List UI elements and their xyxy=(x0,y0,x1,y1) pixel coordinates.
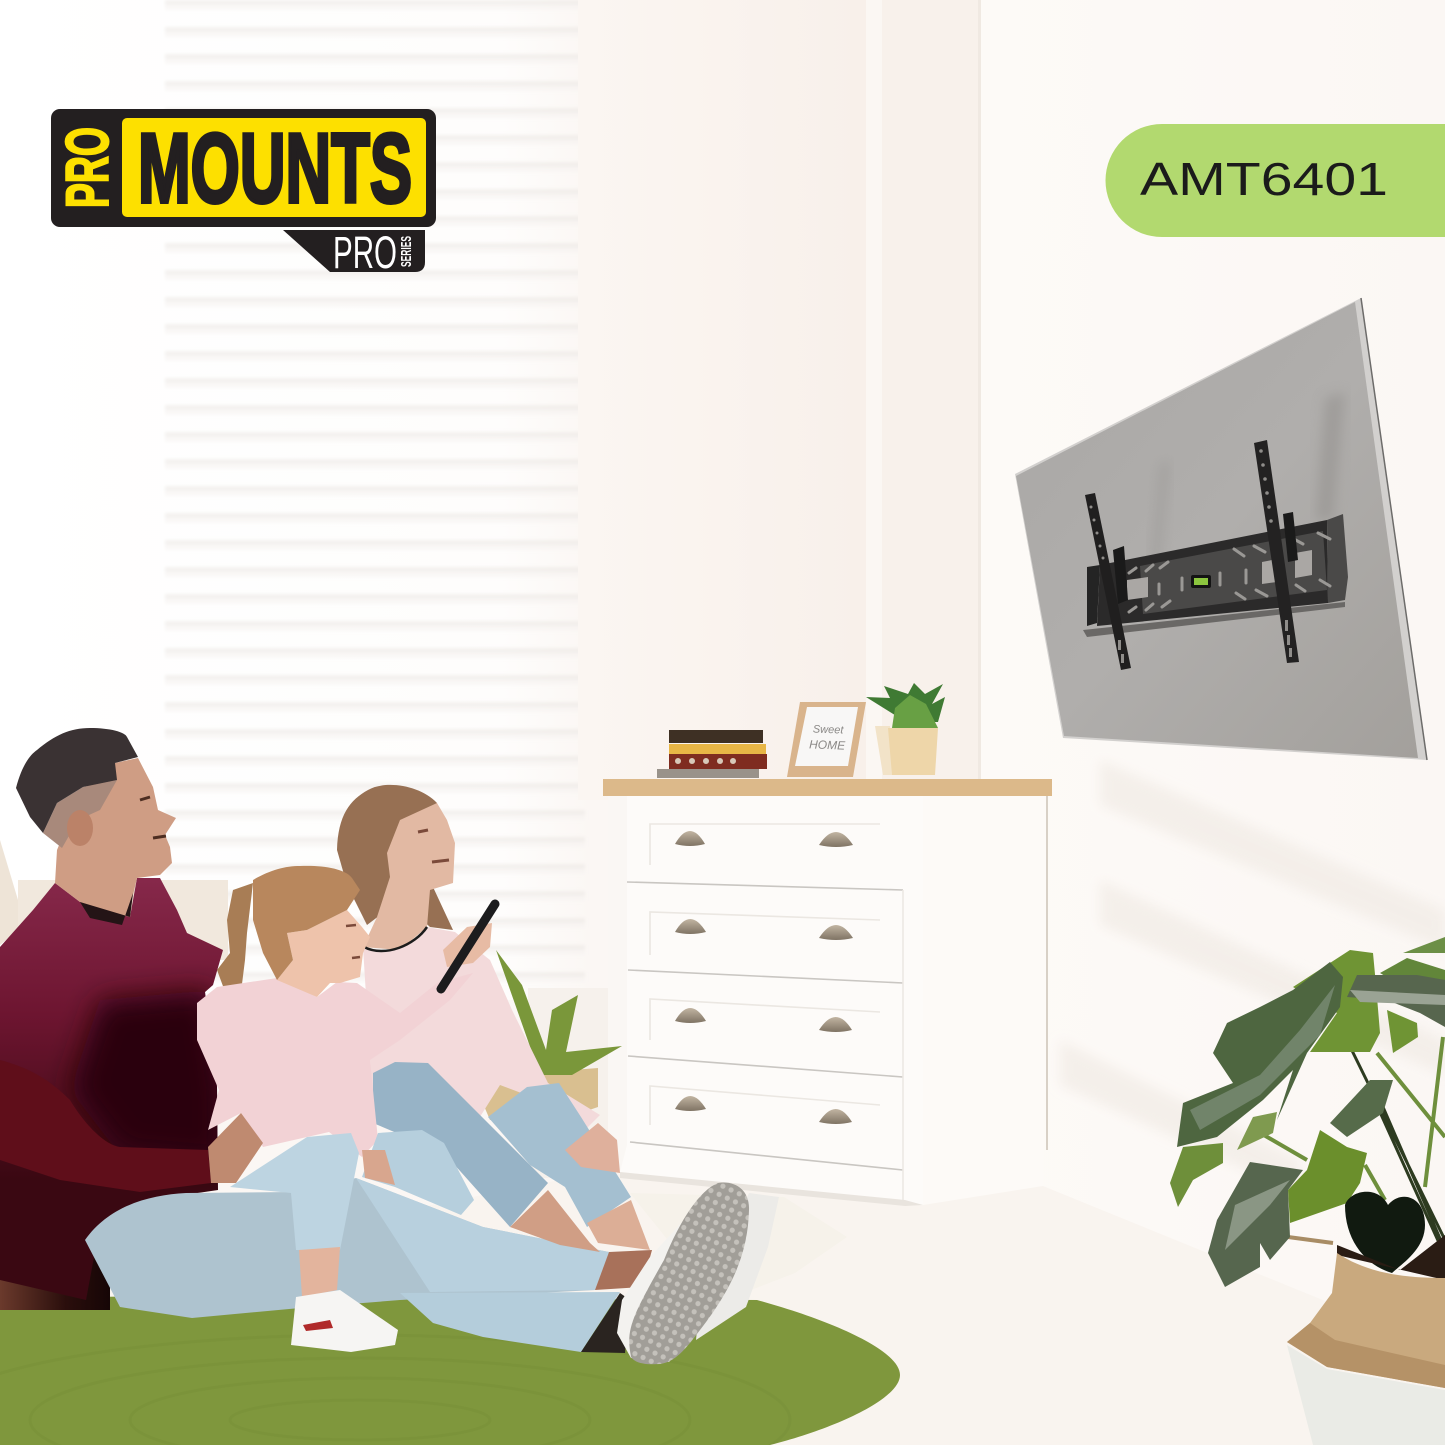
pillow xyxy=(630,1193,847,1290)
man ear xyxy=(67,810,93,846)
man sweater xyxy=(0,878,223,1300)
man undershirt xyxy=(80,893,133,925)
spirit level xyxy=(1191,575,1211,588)
man torso shadow xyxy=(70,990,225,1165)
woman front leg jeans xyxy=(488,1083,631,1227)
plant behind family xyxy=(472,950,622,1120)
man hair fade xyxy=(43,780,117,848)
plant leaf big upper xyxy=(1177,962,1343,1147)
logo MOUNTS wordmark: MOUNTS xyxy=(138,113,412,223)
woman eye and mouth xyxy=(418,830,449,862)
plant leaf small middle xyxy=(1237,1112,1277,1150)
man sleeve xyxy=(0,1060,211,1192)
bracket wall plate xyxy=(1097,520,1328,626)
woman necklace xyxy=(364,927,427,951)
man lower leg jeans xyxy=(400,1292,620,1352)
pot soil xyxy=(1337,1235,1445,1280)
woman xyxy=(337,785,650,1252)
bracket ends xyxy=(1087,565,1100,626)
woman hand xyxy=(565,1123,620,1173)
picture frame xyxy=(787,702,866,777)
man ankles xyxy=(595,1250,652,1290)
logo PRO series tab xyxy=(283,227,425,278)
man jeans hip xyxy=(85,1178,609,1318)
girl hoodie xyxy=(197,973,473,1157)
woman back leg jeans xyxy=(373,1062,548,1227)
large monstera plant xyxy=(1170,937,1445,1445)
left arm xyxy=(1085,493,1131,670)
arm holes xyxy=(1090,449,1292,663)
wall mount bracket xyxy=(1083,440,1348,670)
man hand on girl xyxy=(208,1113,263,1183)
girl shoe xyxy=(291,1290,398,1352)
girl xyxy=(197,866,492,1297)
shoes xyxy=(291,1182,779,1364)
picture frame: HOME xyxy=(809,737,846,753)
plant leaf bright top xyxy=(1293,950,1380,1052)
plant leaf big lower xyxy=(1208,1162,1303,1287)
logo yellow panel xyxy=(122,118,426,217)
plant dark leaves xyxy=(1345,1192,1425,1273)
girl eye and mouth xyxy=(346,925,360,958)
tv back panel xyxy=(1015,298,1427,760)
girl hair xyxy=(253,866,360,980)
man shoe upper xyxy=(617,1183,749,1362)
plant leaf right small xyxy=(1387,1010,1418,1053)
girl knee skin xyxy=(362,1150,395,1185)
man xyxy=(0,728,652,1353)
man eye and mouth xyxy=(140,797,166,838)
dresser top xyxy=(603,779,1052,796)
man lower back shadow xyxy=(0,1130,110,1310)
brand logo xyxy=(51,109,436,278)
logo vertical PRO: PRO xyxy=(54,127,121,208)
bracket cutouts xyxy=(1127,550,1312,600)
plant leaf right grey xyxy=(1347,975,1445,1027)
girl hand xyxy=(443,923,492,967)
girl face xyxy=(277,910,370,997)
plant leaf bright lower xyxy=(1288,1130,1367,1223)
logo black plate xyxy=(51,109,436,227)
logo PRO series tab: PRO xyxy=(333,227,397,278)
man shoe sole xyxy=(629,1182,749,1364)
plant leaf highlight xyxy=(1190,985,1335,1130)
man hair xyxy=(16,728,138,833)
right arm xyxy=(1254,440,1299,663)
plant leaf top right xyxy=(1403,937,1445,953)
plant leaf lone xyxy=(1330,1080,1393,1137)
girl calf xyxy=(299,1247,340,1297)
bracket bottom rail xyxy=(1083,602,1345,637)
small potted plant xyxy=(866,683,945,775)
plant leaf far left lower xyxy=(1170,1143,1223,1207)
girl ponytail xyxy=(213,883,253,1070)
drawer handles xyxy=(675,831,853,1124)
model number badge xyxy=(1106,124,1445,237)
woman hair xyxy=(337,785,453,930)
woven pot xyxy=(1287,1253,1445,1388)
white pot base xyxy=(1287,1345,1445,1445)
plant stems xyxy=(1337,1020,1445,1250)
picture frame: Sweet xyxy=(813,723,845,737)
logo PRO series tab: SERIES xyxy=(398,236,415,267)
woman lower legs xyxy=(510,1190,600,1252)
girl jeans near leg xyxy=(230,1133,359,1250)
model number badge: AMT6401 xyxy=(1140,153,1388,205)
drawer lines xyxy=(627,824,903,1200)
woman shoe xyxy=(696,1193,779,1340)
books xyxy=(657,730,767,778)
bracket slots xyxy=(1129,533,1330,612)
dresser xyxy=(603,779,1052,1206)
man thigh highlight xyxy=(356,1178,609,1292)
woman face xyxy=(363,803,455,950)
woman sweatshirt xyxy=(363,927,600,1130)
green rug xyxy=(0,1297,900,1445)
tv remote xyxy=(441,904,495,989)
man neck and face xyxy=(55,758,176,917)
girl jeans far leg xyxy=(362,1130,474,1215)
